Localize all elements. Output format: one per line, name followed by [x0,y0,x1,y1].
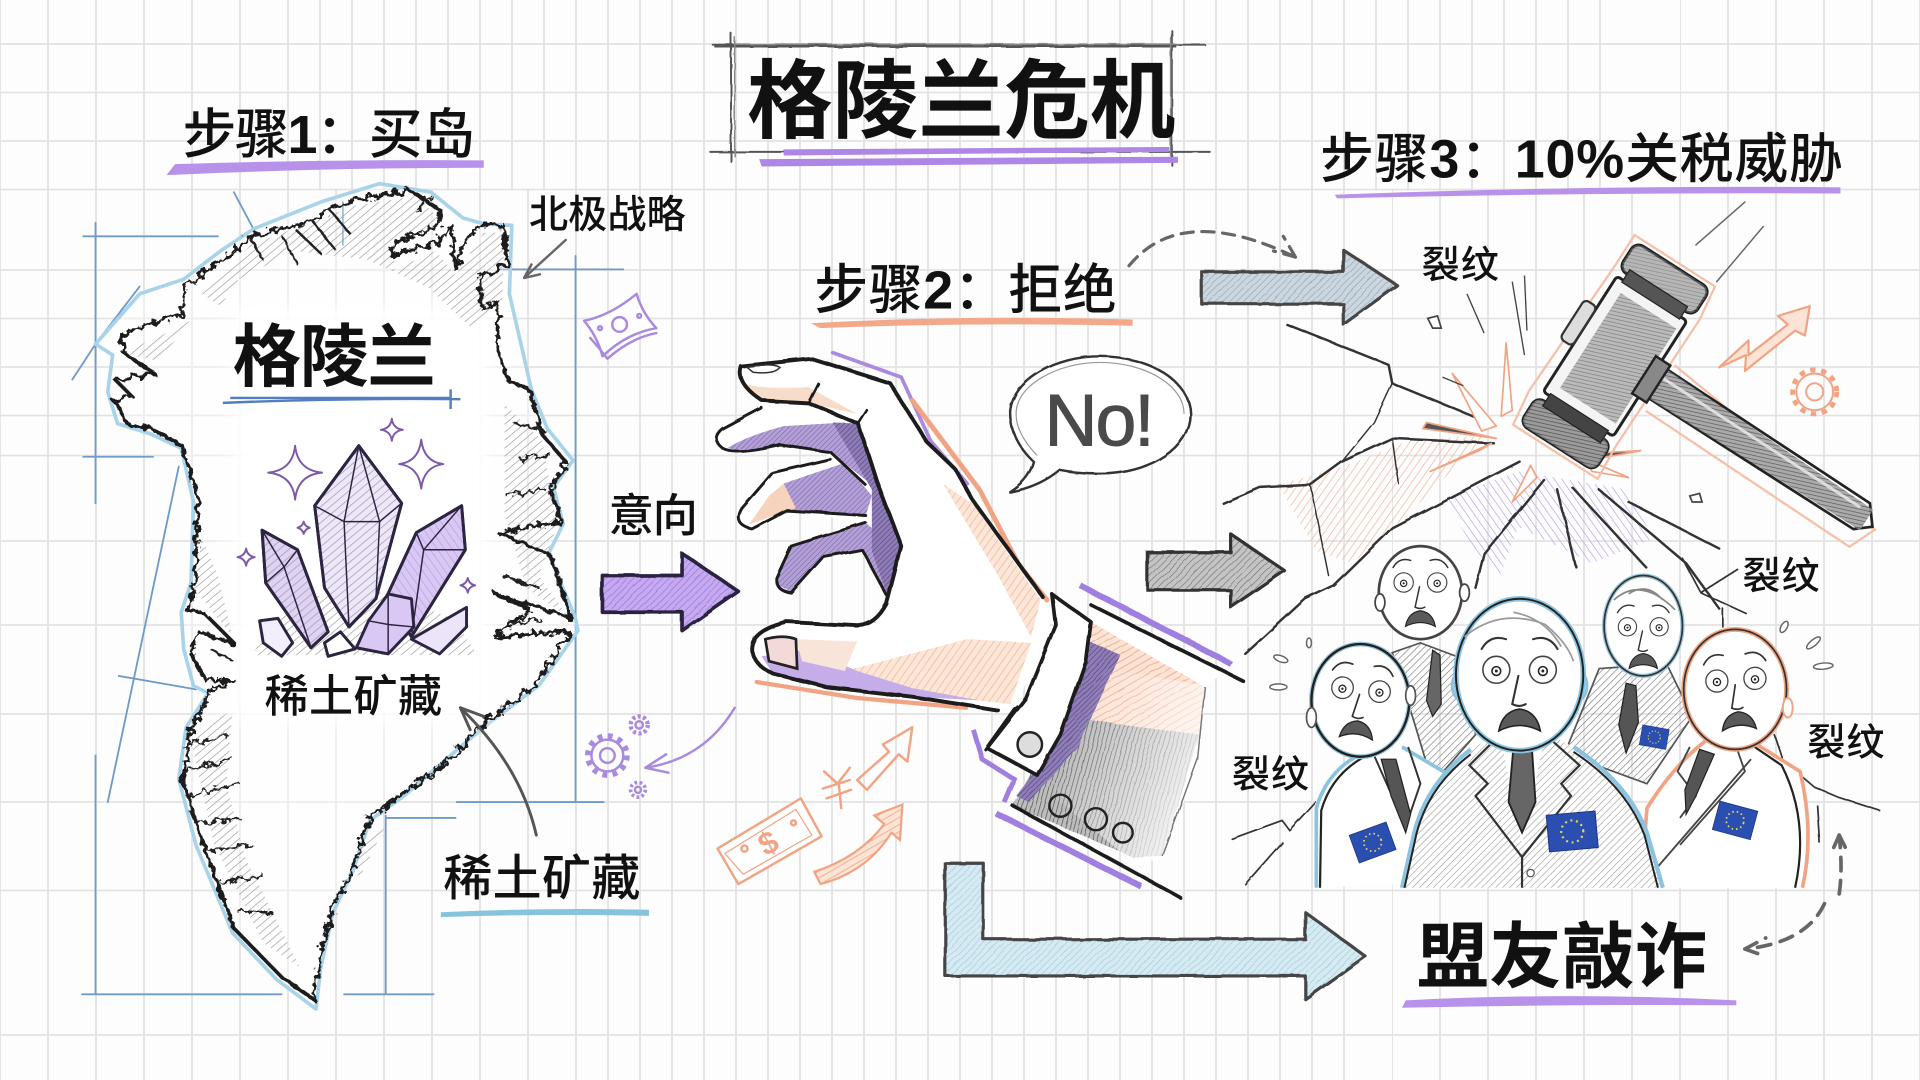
dashed arc arrow [1129,232,1296,266]
person: back right [1567,576,1692,784]
panel: Greenland map [96,184,578,1009]
white panel behind labels [233,306,490,722]
ring finger [749,463,872,524]
coastline [115,190,572,999]
label: crack 3: 裂纹 [1232,754,1309,796]
heading: allied extortion: 盟友敲诈 [1417,918,1707,998]
motion lines [1696,202,1763,282]
arrow: L-shaped to extortion [945,863,1365,999]
dashed return arrow [1745,835,1849,956]
fjord details [184,196,551,912]
flying debris [1428,276,1702,502]
index nail [747,365,780,373]
arrow: to step 3 [1201,250,1397,324]
shirt cuff [987,594,1091,775]
callout: rare earth deposits [441,708,649,917]
outer blue contour [96,184,578,1009]
icon: purple gears and return arrow [588,708,735,797]
sleeve buttons [1049,795,1133,842]
step 1 underline [167,160,484,175]
money icons and orange arrows [718,727,912,884]
cuff button [1018,732,1042,757]
jacket sleeve [973,585,1243,898]
yen scribble [823,768,851,808]
crystal cluster icon [251,446,478,656]
title text: 格陵兰危机 [747,54,1176,150]
callout arrow [460,708,536,835]
sparkles [238,419,475,593]
person: back left [1375,546,1476,784]
bubble text: No! [1044,379,1155,462]
panel: grasping hand [715,353,1243,898]
callout: rare earth deposits: 稀土矿藏 [443,852,640,906]
impact shards [1423,343,1641,502]
icon: gavel [1507,231,1920,619]
callout underline [441,909,649,917]
thumb tint [762,649,980,700]
arrow: intention [602,553,738,631]
speech bubble [1009,356,1190,492]
wrist wash [943,484,1041,637]
label: crack 2: 裂纹 [1742,556,1820,598]
label: crack 1: 裂纹 [1422,245,1499,287]
person: right [1641,629,1808,888]
outlined arrow [857,727,912,790]
gavel orange glow [1509,232,1920,619]
extortion underline [1402,996,1736,1008]
middle finger [727,422,872,485]
label: crack 4: 裂纹 [1807,723,1885,765]
palm spine [833,422,902,600]
person: centre [1402,599,1663,888]
sweat drops [1270,620,1833,690]
hand silhouette [715,359,1052,710]
index finger tint [747,384,857,414]
title [710,31,1210,167]
person: front left [1307,644,1447,888]
step 3 underline [1335,187,1840,198]
heading: step 3: 步骤3：10%关税威胁 [1320,130,1843,190]
gavel handle [1637,362,1884,537]
little finger [775,523,894,595]
hatched arrow [814,804,902,884]
icon: orange lightning arrow [1719,306,1810,371]
orange banknote [718,798,822,884]
icon: purple money [584,294,656,359]
label: intention: 意向 [609,490,698,541]
hand accents [757,353,1047,708]
heading: step 2: 步骤2：拒绝 [814,261,1117,321]
arrow to north coast [524,240,566,278]
crack lines [1223,324,1880,884]
map label underline [223,389,460,409]
coastal hatching [122,196,569,967]
crack shading [1278,435,1488,563]
label: arctic strategy: 北极战略 [529,194,686,237]
icon: orange gear [1793,370,1837,414]
hand outline [716,359,1043,710]
sleeve accents [1080,585,1231,664]
ground cracks and impact [1223,276,1880,884]
group: EU leaders [1270,546,1833,888]
gavel peg [1560,299,1597,346]
gavel collar [1632,356,1670,403]
blueprint construction lines [72,192,623,994]
gavel head body [1543,276,1687,437]
label: arctic strategy [524,194,686,278]
step 2 underline [811,318,1133,328]
heading: step 1: 步骤1：买岛 [182,105,475,165]
dollar sign: $ [752,823,785,863]
gavel caps [1619,242,1710,316]
finger shading [727,384,1041,704]
title underline [759,147,1178,167]
map label: rare earth deposits: 稀土矿藏 [264,672,442,721]
arrow: to allies [1147,534,1284,607]
thumb nail [765,637,797,669]
map label: Greenland: 格陵兰 [233,319,436,396]
